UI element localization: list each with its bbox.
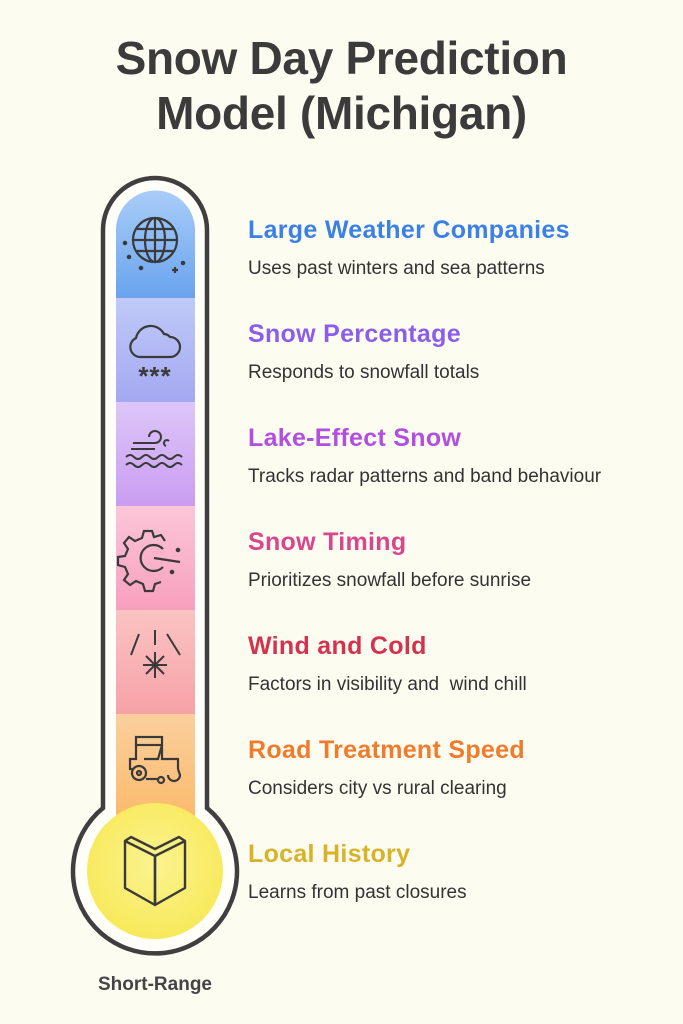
item: Snow Percentage: Snow Percentage [248, 320, 461, 348]
title [116, 32, 567, 139]
item: Local History: Learns from past closures [248, 882, 467, 903]
item: Road Treatment Speed: Road Treatment Speed [248, 736, 525, 764]
item: Snow Timing [248, 528, 531, 591]
segment: periwinkle [116, 298, 195, 402]
item: Wind and Cold: Factors in visibility and wind chill [248, 674, 527, 695]
item: Road Treatment Speed [248, 736, 525, 799]
item: Large Weather Companies: Uses past winters and sea patterns [248, 258, 545, 279]
title: Snow Day Prediction [116, 32, 567, 84]
item: Snow Percentage: Responds to snowfall totals [248, 362, 479, 383]
icon: wind and cold snowflake [131, 630, 180, 678]
item: Snow Timing: Snow Timing [248, 528, 406, 556]
item: Large Weather Companies [248, 216, 570, 279]
item: Road Treatment Speed: Considers city vs rural clearing [248, 778, 507, 799]
item: Local History: Local History [248, 840, 410, 868]
label: Short-Range: Short-Range [98, 974, 212, 995]
icon: plow tractor [130, 737, 180, 783]
bulb: yellow [87, 803, 223, 939]
segment: salmon [116, 610, 195, 714]
icon: book [125, 837, 185, 905]
thermometer outline [73, 178, 237, 953]
item: Lake-Effect Snow: Tracks radar patterns and band behaviour [248, 466, 601, 487]
item: Snow Percentage [248, 320, 479, 383]
item: Wind and Cold: Wind and Cold [248, 632, 427, 660]
item: Local History [248, 840, 467, 903]
item: Lake-Effect Snow: Lake-Effect Snow [248, 424, 461, 452]
segment: blue [116, 190, 195, 298]
segment: pink [116, 506, 195, 610]
item: Lake-Effect Snow [248, 424, 601, 487]
item: Large Weather Companies: Large Weather Companies [248, 216, 570, 244]
icon: cloud with snow [130, 326, 180, 391]
icon: lake waves [126, 431, 182, 467]
item: Wind and Cold [248, 632, 527, 695]
icon: gear clock [118, 531, 180, 591]
icon: globe [124, 218, 184, 273]
item: Snow Timing: Prioritizes snowfall before sunrise [248, 570, 531, 591]
segment: orange [116, 714, 195, 820]
segment: lavender [116, 402, 195, 506]
title: Model (Michigan) [156, 87, 527, 139]
icon: cloud with snow: *** [138, 361, 172, 391]
